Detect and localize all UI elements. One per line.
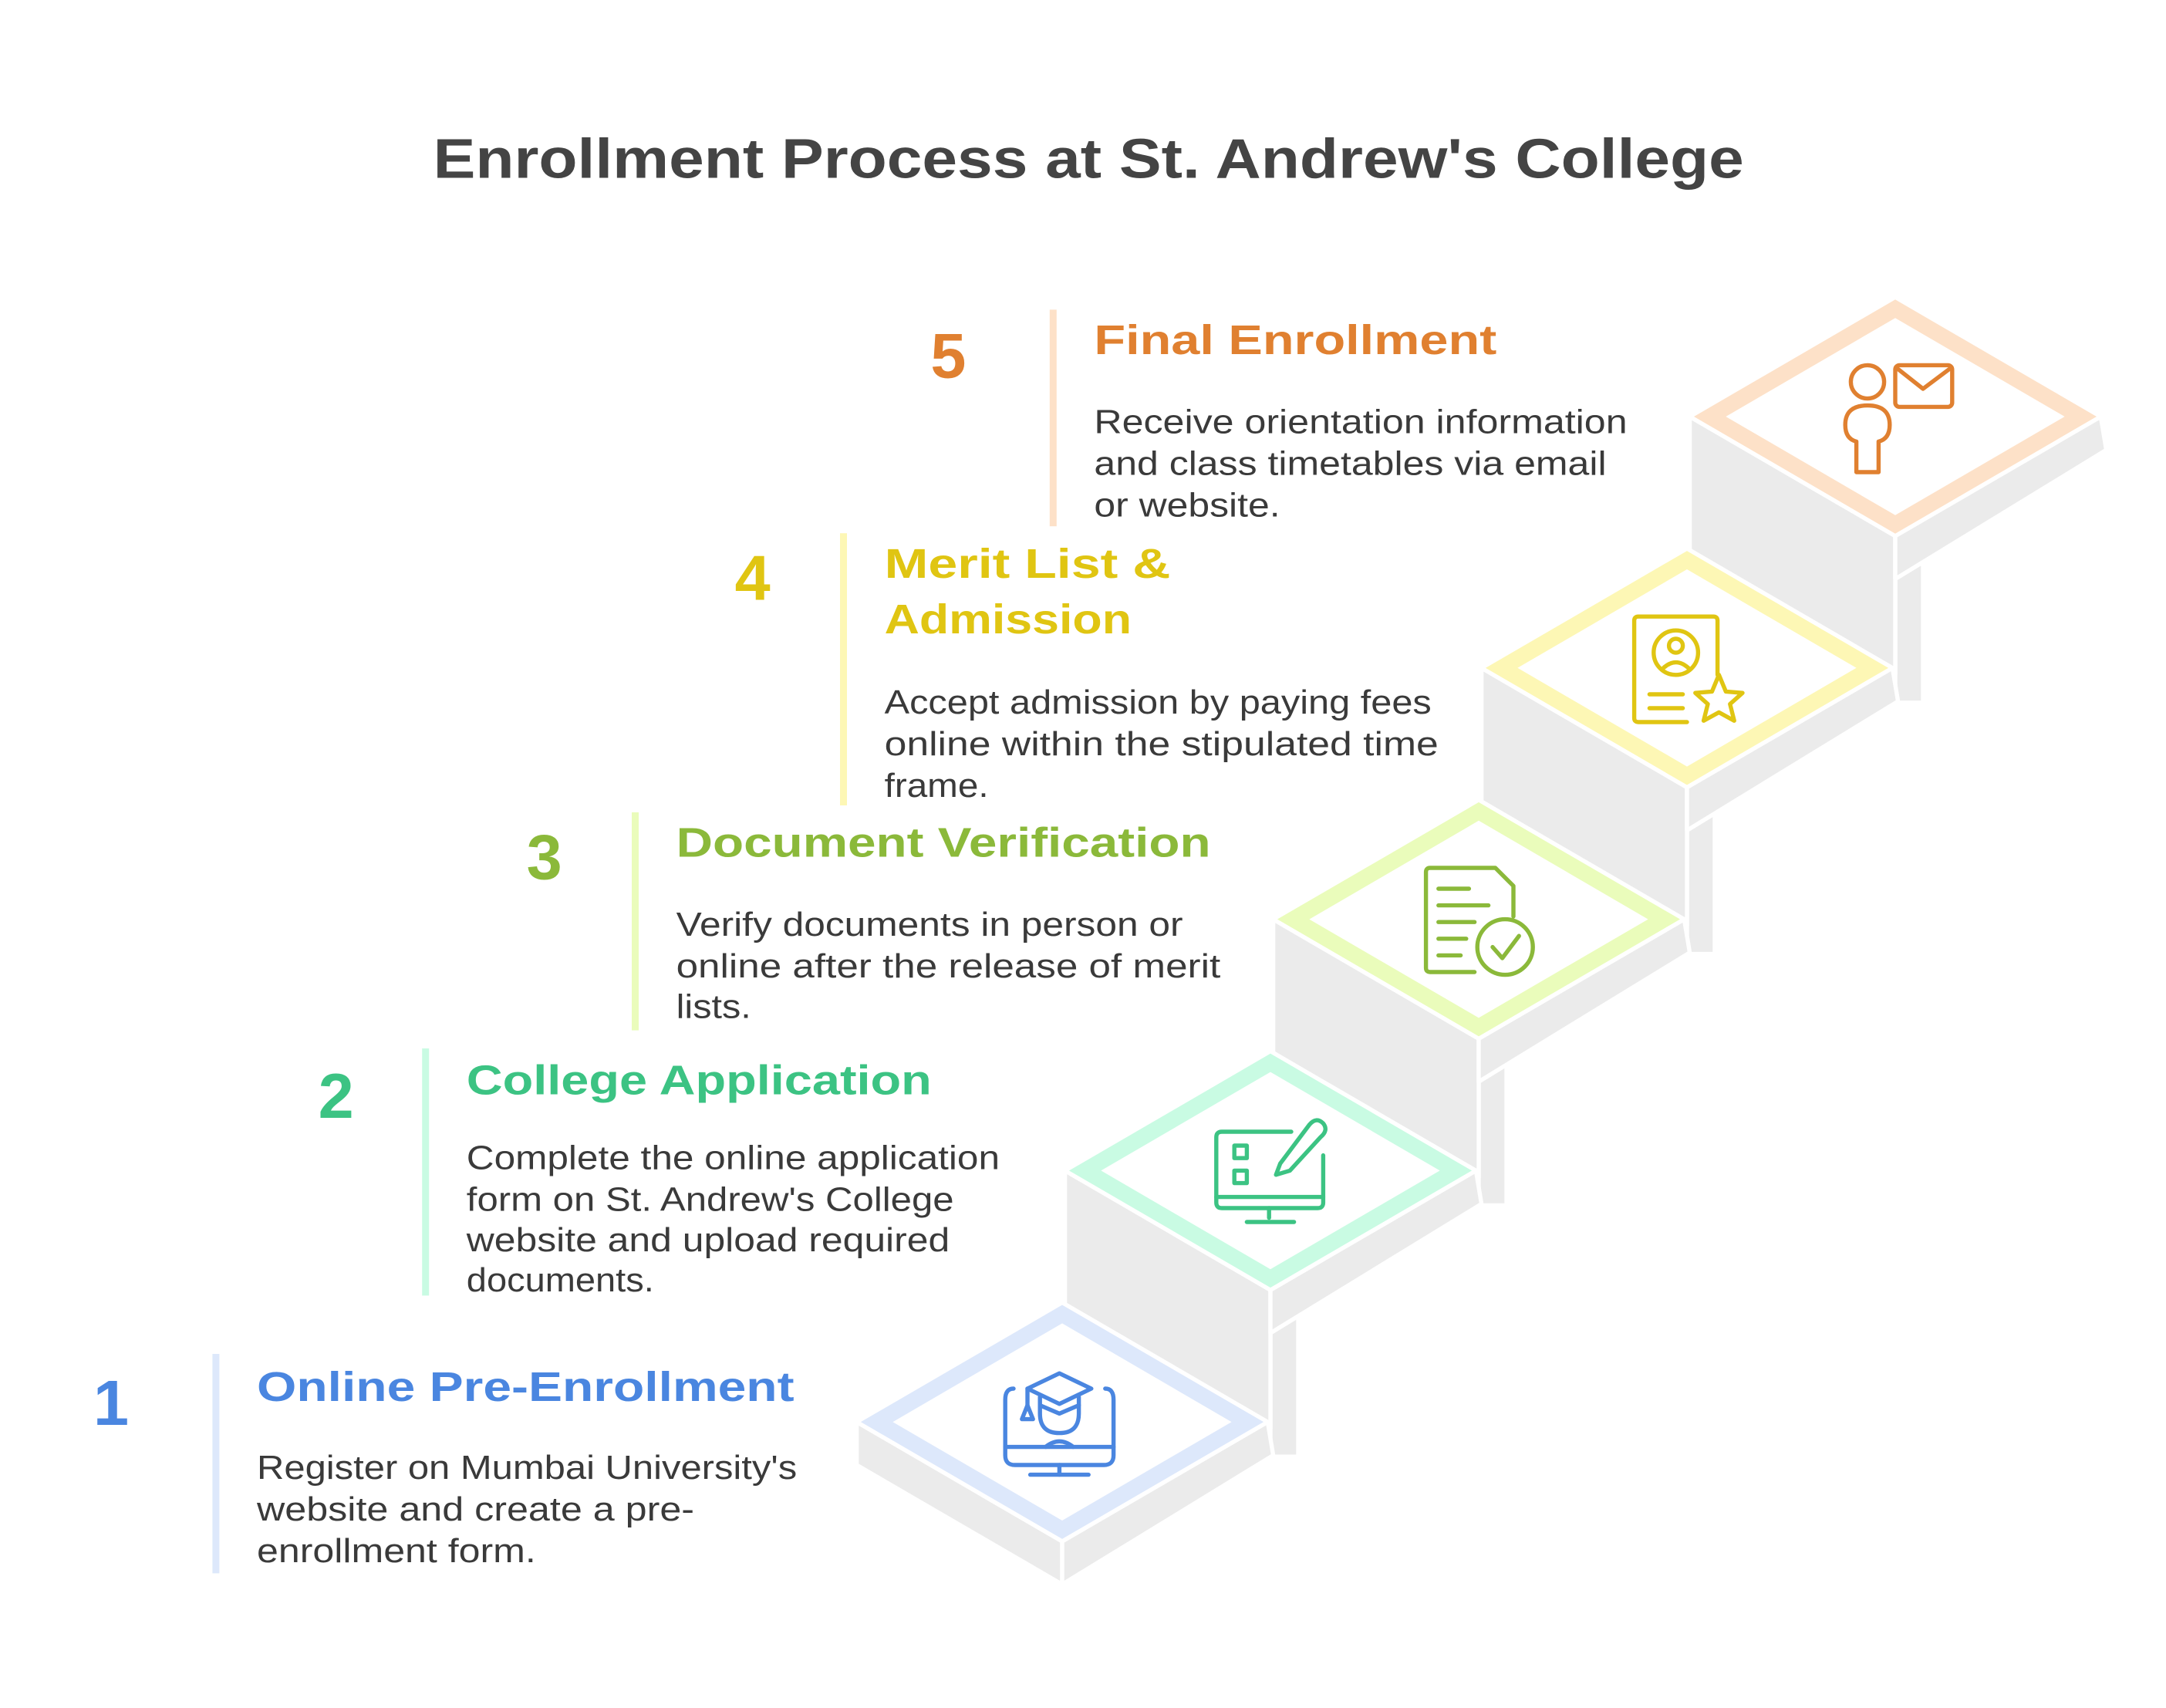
step 5 text: Receive orientation information [1094,404,1628,441]
step block 2 [1065,1051,1482,1457]
step 3 text: online after the release of merit [676,948,1220,985]
step 2 text: website and upload required [466,1222,950,1259]
step 4 text: Accept admission by paying fees [885,684,1432,721]
staircase [857,297,2107,1585]
step 2 text: Complete the online application [467,1140,1000,1177]
step 4 text: 4 [735,542,771,614]
step block 3 [1274,800,1690,1205]
step 5 text [930,309,1628,526]
step 5 text: 5 [930,320,966,392]
step 3 text [527,812,1220,1031]
title: Enrollment Process at St. Andrew's College [434,128,1744,190]
step 4 text: Admission [885,596,1132,643]
step 2 text: College Application [467,1057,932,1103]
step block 5 [1690,297,2107,703]
step 4 text: Merit List & [885,541,1170,587]
step 4 text [735,533,1439,805]
step 1 text: 1 [93,1367,129,1439]
icon: monitor with form and pencil [1216,1120,1325,1222]
step 3 text: lists. [676,988,751,1025]
step block 4 [1482,549,1898,954]
step 1 text: Online Pre-Enrollment [257,1364,795,1410]
step 1 text: enrollment form. [257,1533,536,1570]
step 2 text [319,1048,1000,1299]
step 1 text: Register on Mumbai University's [257,1450,797,1487]
icon: monitor with graduate [1005,1373,1114,1475]
step 5 text: and class timetables via email [1094,446,1607,483]
step 3 text: 3 [527,821,562,893]
icon: document with check [1426,868,1533,975]
step 3 text: Verify documents in person or [676,906,1183,943]
step 4 text: online within the stipulated time [885,726,1439,763]
step 2 text: documents. [467,1262,654,1299]
icon: person with envelope [1845,365,1952,472]
icon: certificate with star [1635,616,1743,722]
step 1 text: website and create a pre- [256,1491,694,1528]
step 2 text: 2 [319,1060,354,1132]
step 2 text: form on St. Andrew's College [467,1182,954,1219]
step 3 text: Document Verification [676,820,1211,866]
step 4 text: frame. [885,768,989,805]
step 1 text [93,1354,797,1573]
step 5 text: or website. [1094,488,1280,525]
step block 1 [857,1302,1274,1585]
step 5 text: Final Enrollment [1094,317,1496,363]
